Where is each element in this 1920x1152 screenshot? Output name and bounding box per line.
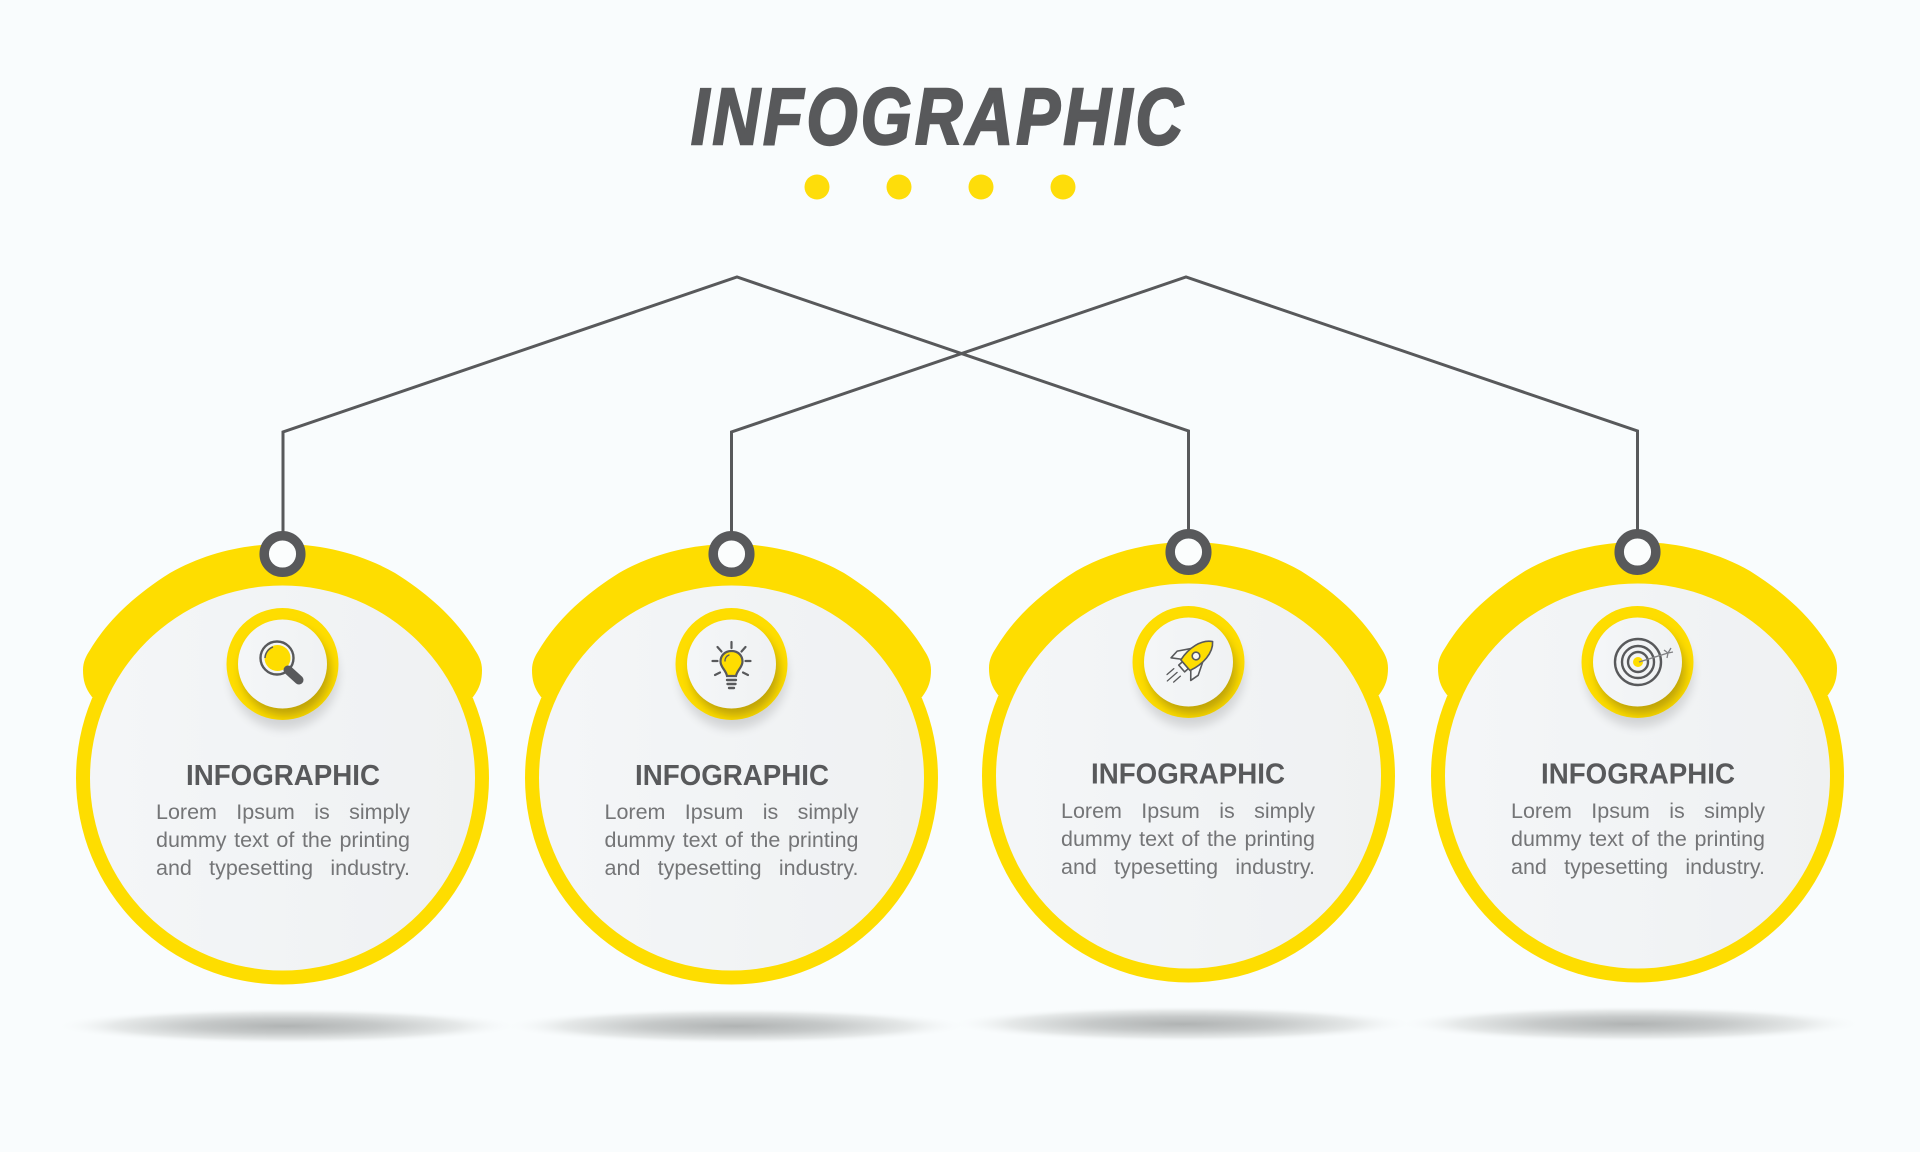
body text 3 (1061, 799, 1315, 879)
card 4 graphic (1431, 529, 1844, 1039)
icon: target with arrow (1615, 639, 1673, 685)
card 4: target (1431, 529, 1844, 1039)
card 3: launch (982, 529, 1395, 1039)
body text 4 (1511, 799, 1765, 879)
body text 1: dummy text of the printing (156, 828, 410, 852)
body text 4: dummy text of the printing (1511, 827, 1765, 851)
body text 3: dummy text of the printing (1061, 827, 1315, 851)
body text 2: Lorem Ipsum is simply (604, 800, 858, 824)
heading 3: INFOGRAPHIC (1091, 758, 1285, 790)
body text 1 (156, 800, 410, 880)
title dots (804, 174, 1076, 200)
icon: rocket (1157, 629, 1223, 693)
card 2: idea (525, 531, 938, 1041)
title: INFOGRAPHIC (691, 72, 1186, 161)
body text 1: Lorem Ipsum is simply (156, 800, 410, 824)
body text 4: and typesetting industry. (1511, 855, 1765, 879)
card 2 graphic (525, 531, 938, 1041)
icon: magnifying glass (260, 642, 299, 680)
body text 3: and typesetting industry. (1061, 855, 1315, 879)
body text 4: Lorem Ipsum is simply (1511, 799, 1765, 823)
card 1: search (76, 531, 489, 1041)
heading 4: INFOGRAPHIC (1541, 758, 1735, 790)
body text 1: and typesetting industry. (156, 856, 410, 880)
connector lines (282, 275, 1639, 532)
body text 2: and typesetting industry. (604, 856, 858, 880)
card 1 graphic (76, 531, 489, 1041)
card 3 graphic (982, 529, 1395, 1039)
body text 3: Lorem Ipsum is simply (1061, 799, 1315, 823)
body text 2 (604, 800, 858, 880)
body text 2: dummy text of the printing (604, 828, 858, 852)
heading 2: INFOGRAPHIC (634, 760, 829, 792)
icon: light bulb (712, 642, 750, 688)
heading 1: INFOGRAPHIC (186, 760, 380, 792)
